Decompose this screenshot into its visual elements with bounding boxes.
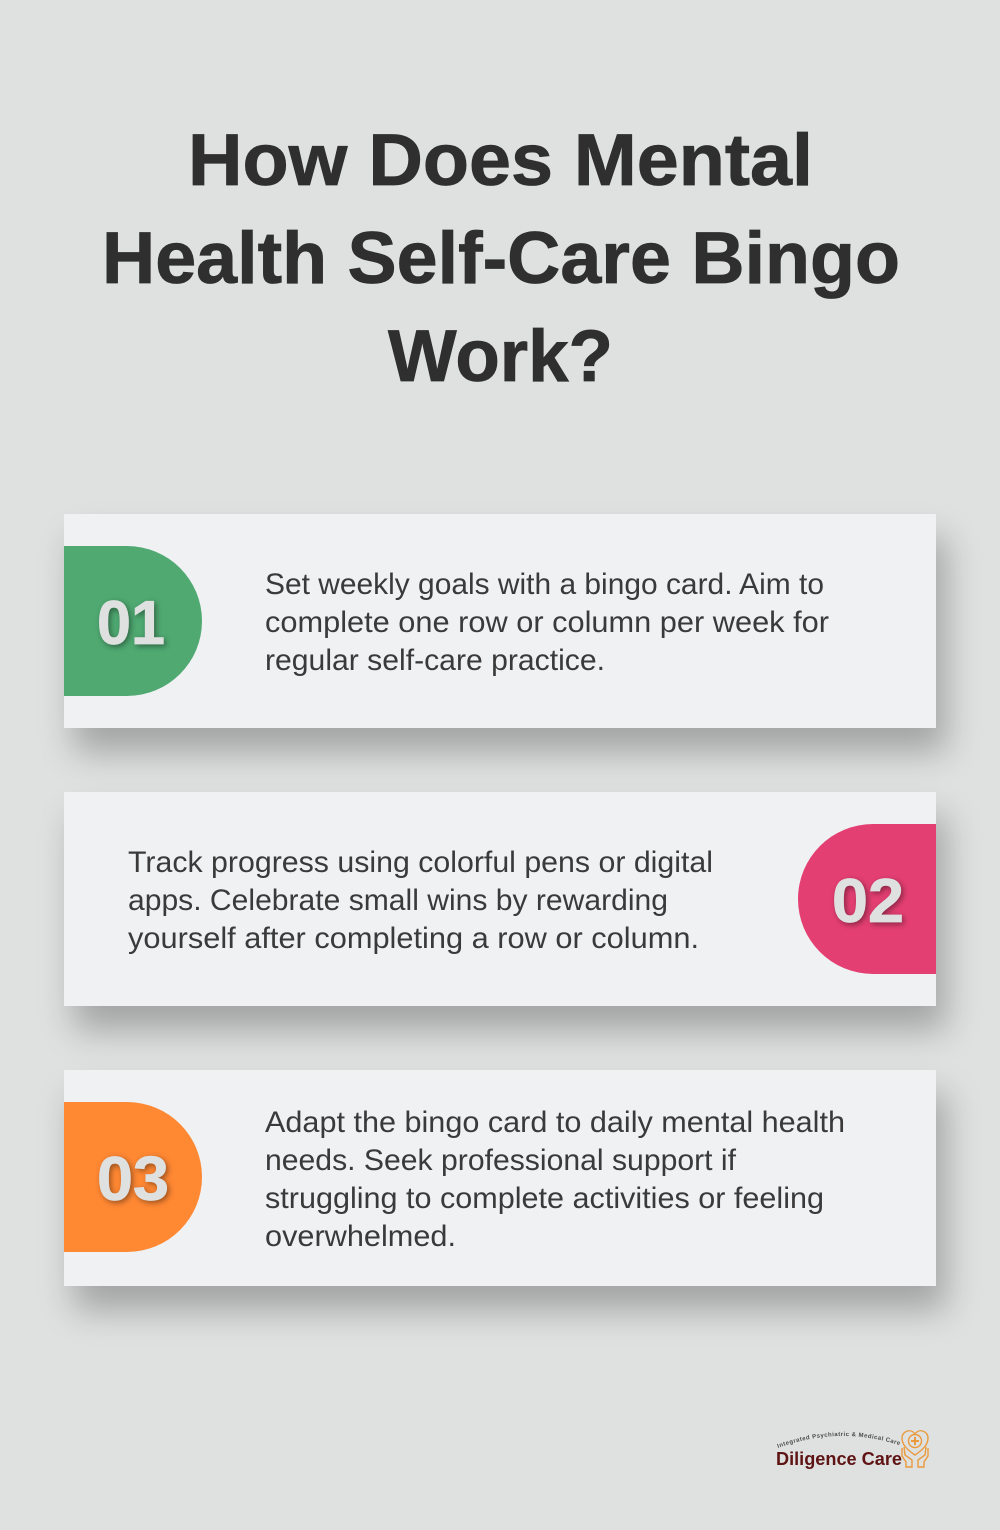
step 3 text: needs. Seek professional support if	[265, 1144, 737, 1177]
step 3 text: struggling to complete activities or feeling	[265, 1182, 824, 1215]
step 1 text: complete one row or column per week for	[265, 606, 829, 639]
panel: step 3 card	[64, 1070, 936, 1286]
step 1 text: Set weekly goals with a bingo card. Aim to	[265, 568, 824, 601]
title	[102, 120, 900, 397]
step 1 badge: 01	[97, 589, 165, 658]
step 2 text: apps. Celebrate small wins by rewarding	[128, 884, 668, 917]
icon: heart with cross and hands	[902, 1431, 928, 1467]
title: Health Self-Care Bingo	[102, 218, 900, 299]
step 2 text: yourself after completing a row or column.	[128, 922, 699, 955]
logo: Diligence Care: Diligence Care	[776, 1449, 902, 1469]
step 1 text	[265, 568, 829, 677]
panel: step 2 card	[64, 792, 936, 1006]
step 3 text	[265, 1106, 845, 1253]
step 2 badge	[798, 824, 936, 974]
step 3 badge: 03	[97, 1145, 169, 1214]
title: Work?	[388, 316, 613, 397]
step 3 badge	[64, 1102, 202, 1252]
step 2 text	[128, 846, 713, 955]
logo: Diligence Care: Integrated Psychiatric & Medical Care	[777, 1432, 900, 1448]
step 3 text: Adapt the bingo card to daily mental health	[265, 1106, 845, 1139]
step 1 badge	[64, 546, 202, 696]
title: How Does Mental	[188, 120, 813, 201]
step 1 text: regular self-care practice.	[265, 644, 605, 677]
logo: Diligence Care	[776, 1430, 929, 1469]
step 3 text: overwhelmed.	[265, 1220, 456, 1253]
step 2 text: Track progress using colorful pens or digital	[128, 846, 713, 879]
step 2 badge: 02	[832, 867, 904, 936]
panel: step 1 card	[64, 514, 936, 728]
